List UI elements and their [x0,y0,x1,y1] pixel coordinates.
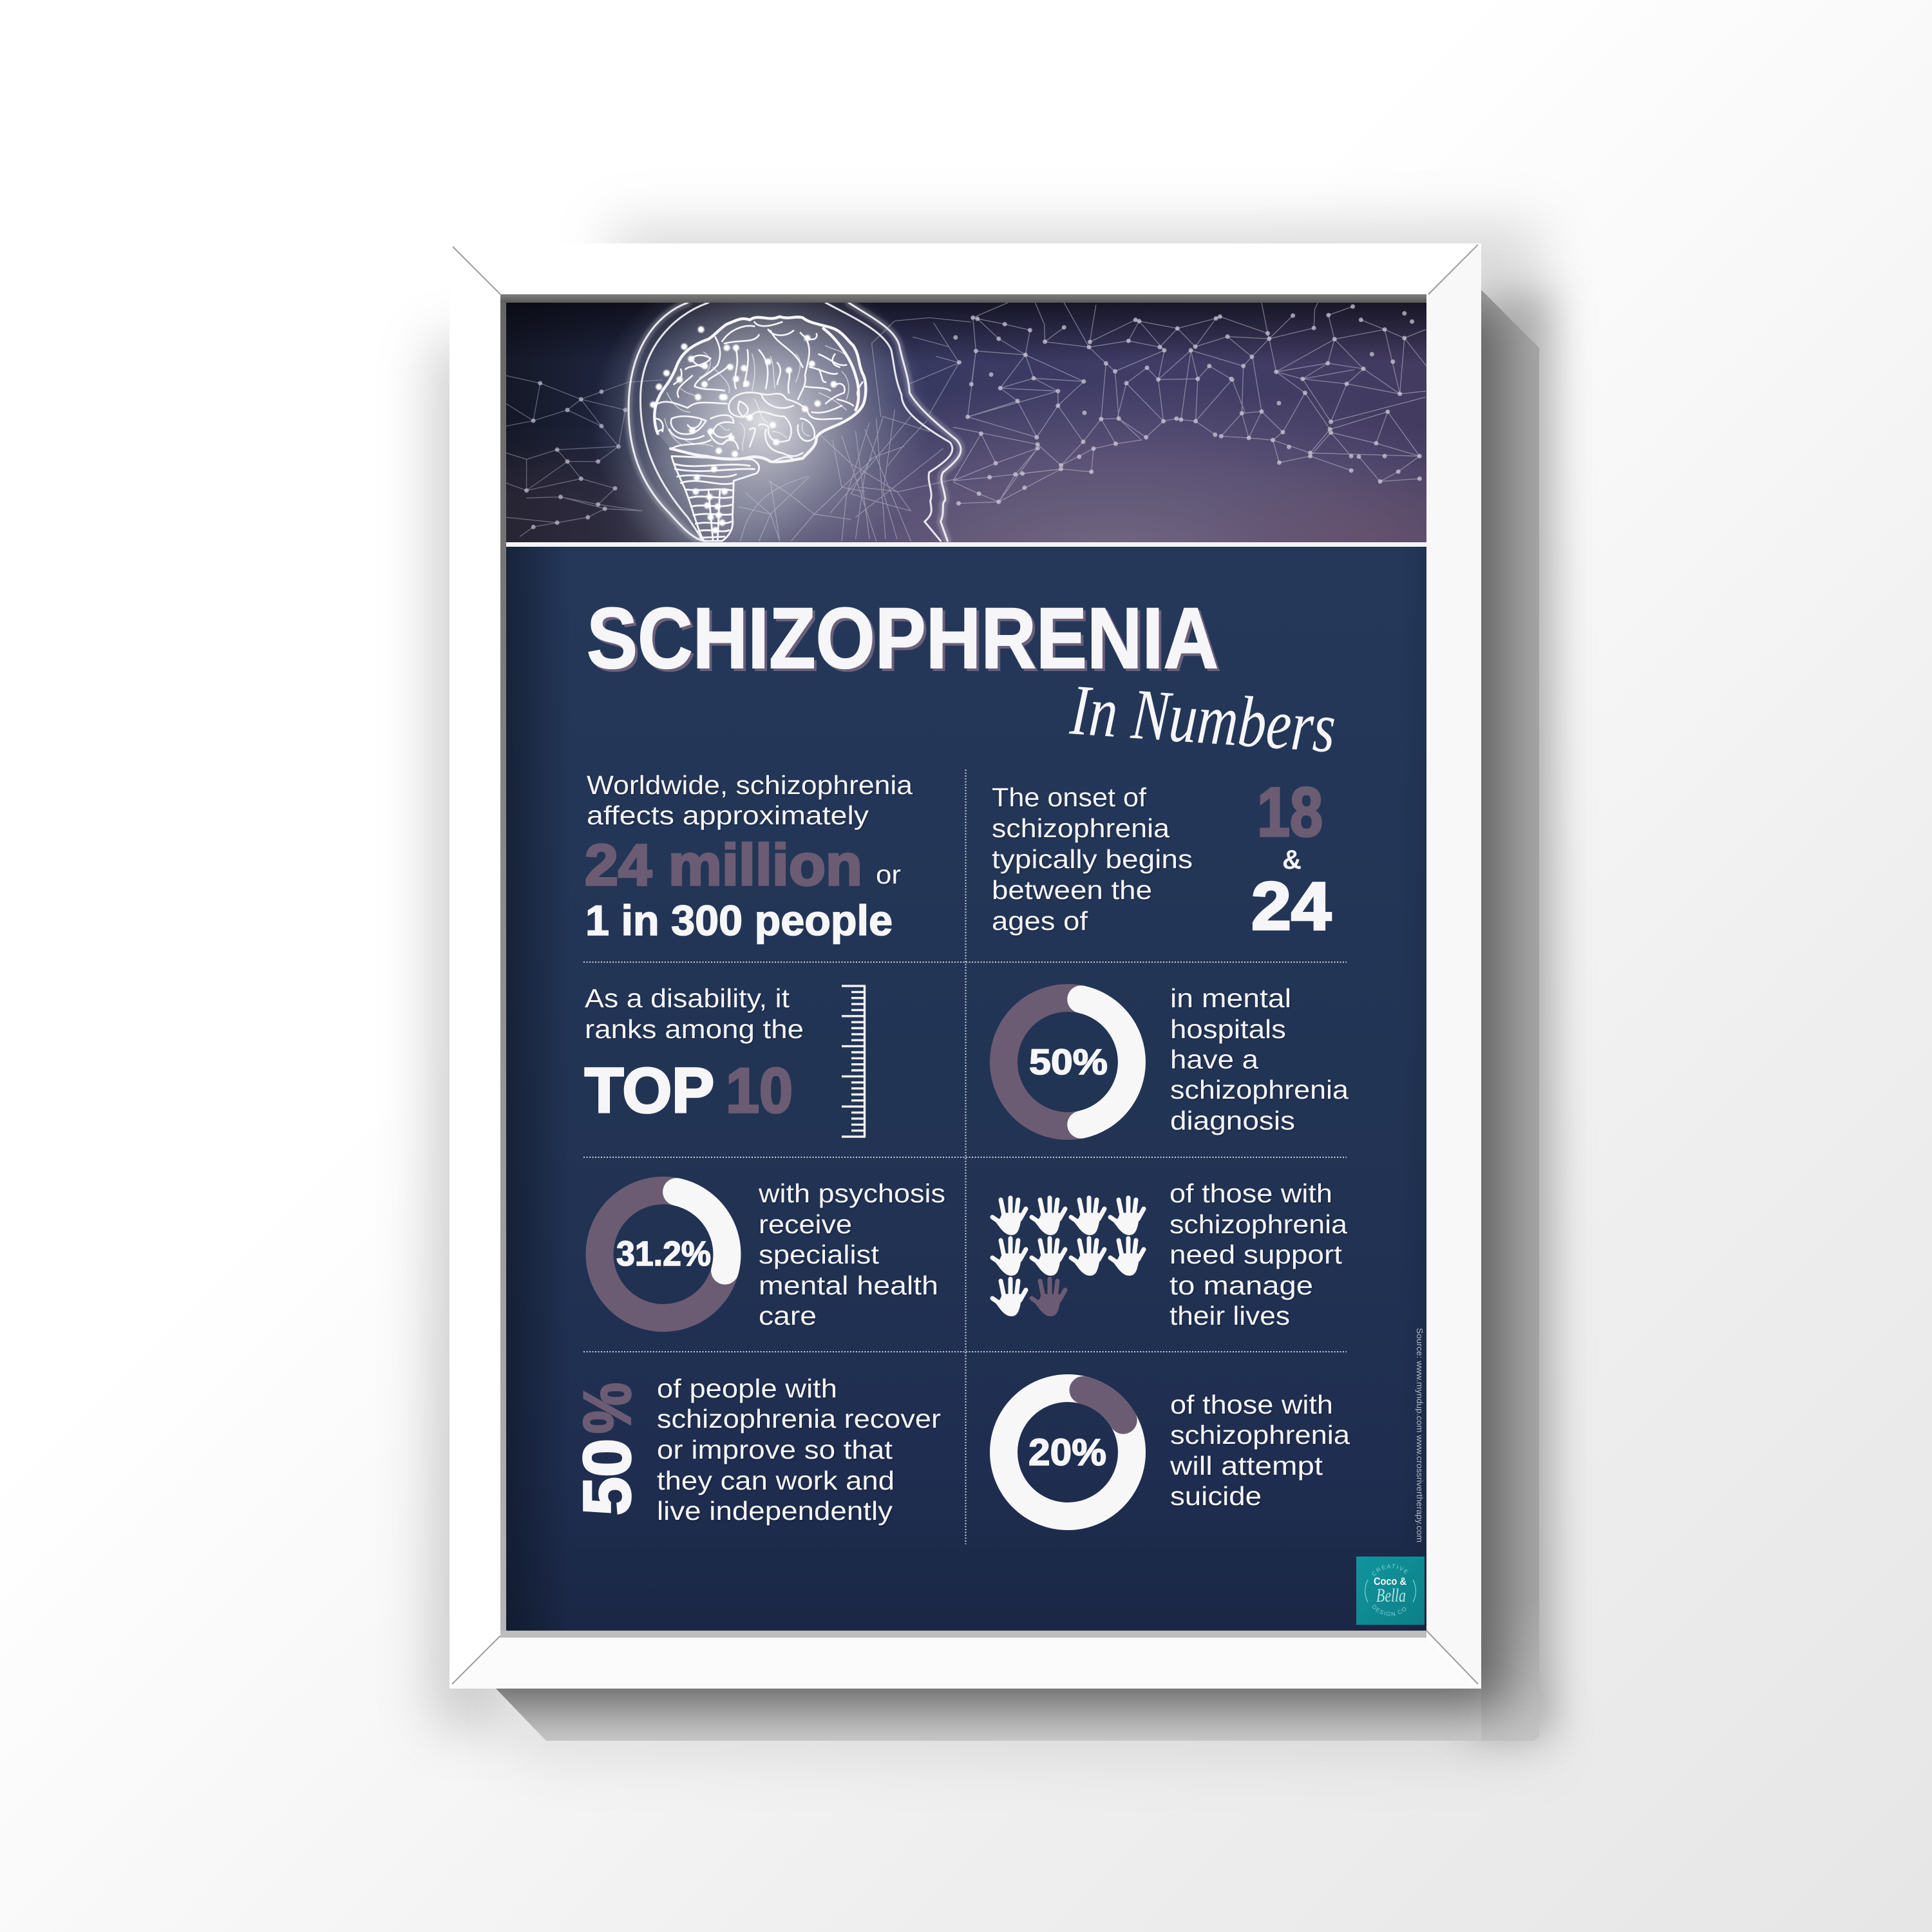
badge parentheses [1365,1580,1416,1602]
rotated 50% [570,1383,644,1515]
psychosis text: with psychosis [758,1179,945,1208]
stat: 20% suicide attempts: suicide [1170,1481,1262,1511]
stat: age of onset: schizophrenia [992,813,1170,843]
network: right section nodes [956,307,1419,504]
top 10: TOP [585,1055,714,1126]
stat: 50% mental hospitals: hospitals [1170,1014,1286,1044]
white picture frame [450,243,1481,1689]
stat: top 10 disability: ranks among the [585,1014,804,1044]
inner bottom lip [500,1631,1426,1638]
hard cast shadow of frame [496,290,1539,1741]
stat: age of onset: 24 [1251,869,1331,944]
stat: 20% suicide attempts: schizophrenia [1170,1420,1350,1450]
stat: age of onset: typically begins [992,844,1193,874]
stat: 24 million [585,770,913,944]
stat: 9 of 10 need support [992,1179,1347,1331]
stat: 50% recover: live independently [657,1496,893,1526]
title [587,591,1338,768]
stat: 9 of 10 need support: their lives [1170,1301,1290,1331]
brain silhouette fill [654,317,866,462]
stat: 24 million: affects approximately [587,800,869,830]
head outline glow [629,303,961,541]
stat: 50% recover: they can work and [657,1466,895,1495]
bottom frame tint [453,1638,1478,1689]
brain glow [601,303,918,542]
stat: age of onset: & [1282,844,1302,875]
logo badge [1356,1557,1425,1625]
secondary brain folds [665,346,849,451]
support text: of those with [1170,1179,1332,1208]
donut 50% [1003,998,1132,1126]
stat: 50% mental hospitals: schizophrenia [1170,1075,1349,1104]
stat: 9 of 10 need support: schizophrenia [1170,1209,1347,1239]
donut 31.2% [600,1190,727,1318]
big number: 24 million [585,833,862,898]
recover text: of people with [657,1374,837,1403]
soft ambient shadow around frame [433,227,1552,1758]
intro text: Worldwide, schizophrenia [587,770,913,800]
stat: 20% suicide attempts: will attempt [1170,1451,1323,1481]
frame body [450,243,1481,1689]
donut 20% [1003,1388,1132,1516]
badge name: Coco & [1374,1575,1406,1587]
stat: age of onset: between the [992,875,1152,905]
rotated 50%: % [570,1383,644,1434]
stat: 50% recover: schizophrenia recover [657,1404,941,1434]
sparkles [653,330,834,530]
right frame tint [1426,246,1481,1686]
source note: Source: www.myndup.com www.crossrivertherapy.com [1415,1328,1425,1542]
brain outline [654,317,866,462]
icon: ruler [842,986,866,1137]
badge square [1356,1557,1425,1625]
rotated 50%: 50 [570,1439,644,1515]
stat: 50% mental hospitals: diagnosis [1170,1106,1295,1135]
navy poster panel [506,547,1426,1631]
stat: 31.2% psychosis: receive [759,1209,852,1239]
network: left section [506,375,663,536]
header gradient [506,303,1426,542]
stat: age of onset [992,773,1331,944]
stat: 9 of 10 need support: to manage [1170,1271,1313,1300]
subtitle: in numbers: In Numbers [1067,670,1338,768]
stat: 50% mental hospitals [1003,983,1349,1135]
stat: 31.2% psychosis: care [759,1301,817,1331]
inner left lip shadow [500,303,506,1633]
stat: 50% recover [570,1374,941,1526]
stat: age of onset: ages of [992,906,1088,936]
header image: brain and neural network [506,303,1426,542]
suicide text: of those with [1170,1390,1333,1419]
stat: 50% recover: or improve so that [657,1435,893,1464]
donut label: 20% [1028,1432,1106,1473]
inner top lip shadow [500,294,1426,303]
brain folds [656,322,862,462]
onset text: The onset of [992,782,1147,812]
hospitals text: in mental [1170,983,1291,1013]
stat: 20% suicide attempts [1003,1388,1350,1516]
badge arc text top: CREATIVE [1372,1564,1408,1575]
stat: 24 million: or [876,860,901,889]
icon: hands [992,1198,1144,1316]
ages: 18 [1257,773,1323,851]
stat: 50% mental hospitals: have a [1170,1045,1258,1074]
head outline [629,303,961,541]
badge script: Bella [1376,1585,1406,1606]
1 in 300: 1 in 300 people [585,896,893,944]
donut label: 31.2% [616,1235,711,1273]
stat: 31.2% psychosis: mental health [759,1271,938,1300]
grid dividers [583,770,1347,1544]
title: schizophrenia: SCHIZOPHRENIA [587,591,1218,687]
stat: top 10 disability: 10 [726,1055,793,1126]
stat: 31.2% psychosis [600,1179,945,1331]
brain and head drawing [629,303,971,541]
stat: 9 of 10 need support: need support [1170,1240,1343,1269]
disability text: As a disability, it [585,983,790,1013]
donut label: 50% [1029,1041,1108,1082]
stat: top 10 disability [585,983,866,1137]
brain stem [672,456,759,541]
network inside head [738,317,971,541]
network: right section lines [953,303,1427,504]
badge arc text bottom: DESIGN CO [1372,1605,1406,1616]
stat: 31.2% psychosis: specialist [759,1240,880,1269]
header divider [506,542,1426,547]
mitre joints [452,245,1478,1684]
